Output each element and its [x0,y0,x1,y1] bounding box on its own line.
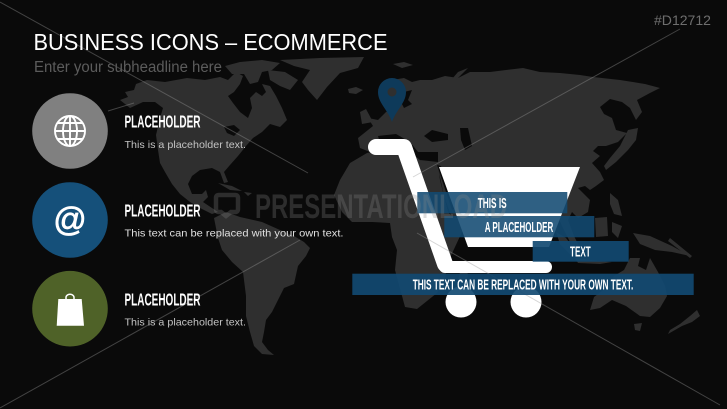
banner label: a placeholder: A PLACEHOLDER [485,220,554,236]
title: BUSINESS ICONS – ECOMMERCE [34,29,388,55]
heading: PLACEHOLDER [124,112,201,132]
banner background: long text [352,274,694,295]
heading: PLACEHOLDER [124,201,201,221]
heading: PLACEHOLDER [124,290,201,310]
watermark logo [216,188,507,226]
grey circle [32,93,108,169]
blue circle [32,182,108,258]
banner background: text [533,241,629,262]
icon: location pin [378,78,406,122]
item 1: globe [32,93,246,169]
map inland seas [224,90,472,210]
green circle [32,271,108,347]
icon: shopping bag [57,294,84,326]
banner label: text: TEXT [570,244,591,260]
icon: globe [55,116,85,146]
body text: This is a placeholder text. [124,139,246,151]
banner label: this is: THIS IS [478,196,507,212]
item 3: shopping bag [32,271,246,347]
cart wheels [446,286,542,318]
watermark icon [216,195,238,216]
banner background: a placeholder [444,216,594,237]
cart basket [439,167,580,247]
world map [120,57,700,355]
banner background: this is [417,192,567,213]
body text: This text can be replaced with your own text. [124,228,344,240]
watermark text: PRESENTATIONLOAD [255,188,507,226]
icon: at sign: @ [53,200,87,238]
cart frame [376,147,546,267]
shopping cart [376,147,580,318]
subheadline: Enter your subheadline here [34,59,222,76]
document code: #D12712 [654,13,711,28]
item 2: at sign [32,182,343,258]
body text: This is a placeholder text. [124,317,246,329]
